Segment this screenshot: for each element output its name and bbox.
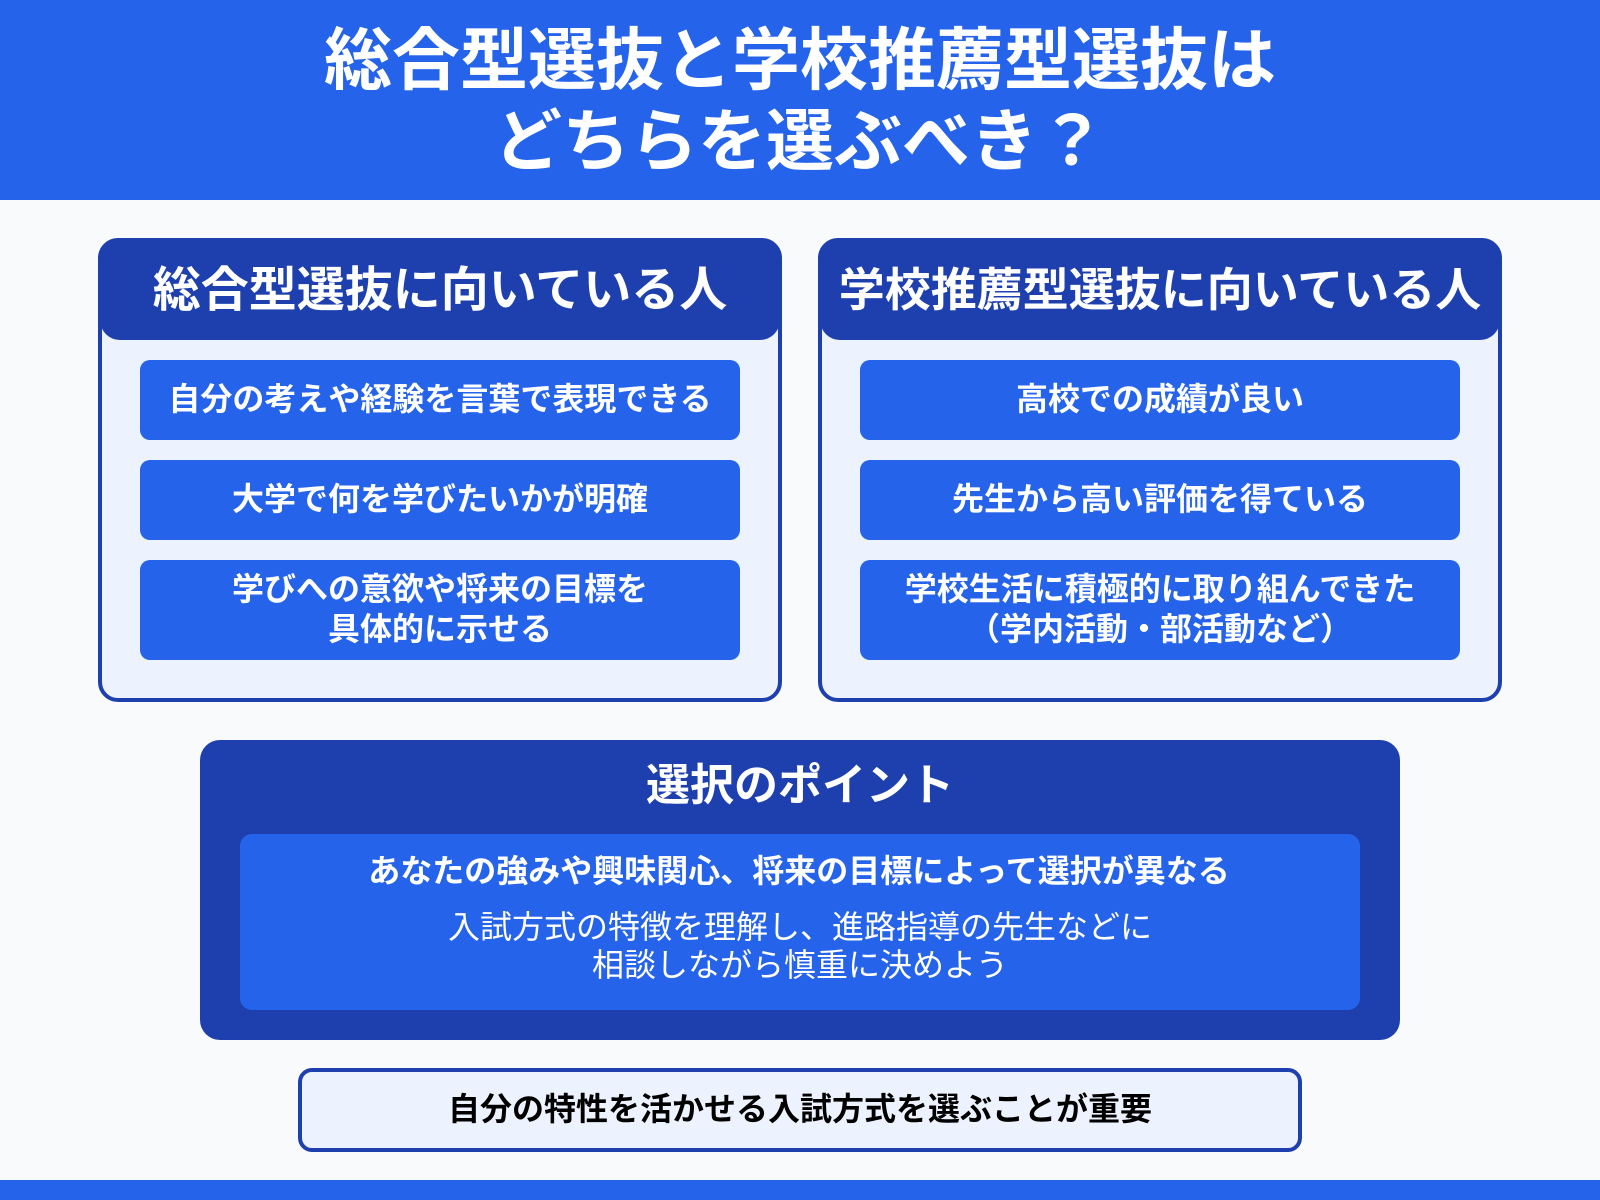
footer bar: [0, 1180, 1600, 1200]
inner box: 選択の説明: [240, 834, 1360, 1010]
heading: 選択のポイント: 選択のポイント: [646, 761, 954, 810]
item: 学びの明確さ: [140, 460, 740, 540]
header banner and title: どちらを選ぶべき？: [494, 104, 1106, 180]
item: 意欲と目標: [140, 560, 740, 660]
callout: 結論: [298, 1068, 1302, 1152]
item: 表現力: [140, 360, 740, 440]
item: 学校生活: 学校生活に積極的に取り組んできた: [905, 570, 1415, 606]
item: 成績: [860, 360, 1460, 440]
panel heading: 総合型選抜: [100, 238, 780, 340]
header banner and title: [0, 0, 1600, 200]
panel: 総合型選抜に向いている人: [98, 238, 782, 702]
text: 選択が異なる: あなたの強みや興味関心、将来の目標によって選択が異なる: [368, 853, 1230, 889]
item: 意欲と目標: 具体的に示せる: [328, 610, 552, 646]
callout: 結論: 自分の特性を活かせる入試方式を選ぶことが重要: [448, 1091, 1152, 1127]
panel: 選択のポイント: [200, 740, 1400, 1040]
item: 学びの明確さ: 大学で何を学びたいかが明確: [232, 480, 648, 516]
panel heading: 学校推薦型選抜: 学校推薦型選抜に向いている人: [839, 264, 1481, 316]
item: 先生の評価: [860, 460, 1460, 540]
text: 相談して決めよう: 入試方式の特徴を理解し、進路指導の先生などに: [448, 909, 1152, 945]
item: 成績: 高校での成績が良い: [1016, 380, 1304, 416]
item: 学校生活: [860, 560, 1460, 660]
item: 意欲と目標: 学びへの意欲や将来の目標を: [232, 570, 648, 606]
text: 相談して決めよう: [448, 909, 1152, 983]
item: 学校生活: （学内活動・部活動など）: [968, 610, 1352, 646]
panel heading: 総合型選抜: 総合型選抜に向いている人: [153, 264, 727, 317]
item: 先生の評価: 先生から高い評価を得ている: [952, 480, 1368, 516]
text: 相談して決めよう: 相談しながら慎重に決めよう: [592, 947, 1008, 983]
panel heading: 学校推薦型選抜: [820, 238, 1500, 340]
header banner and title: 総合型選抜と学校推薦型選抜は: [324, 23, 1276, 99]
panel: 学校推薦型選抜に向いている人: [818, 238, 1502, 702]
item: 表現力: 自分の考えや経験を言葉で表現できる: [168, 380, 712, 416]
